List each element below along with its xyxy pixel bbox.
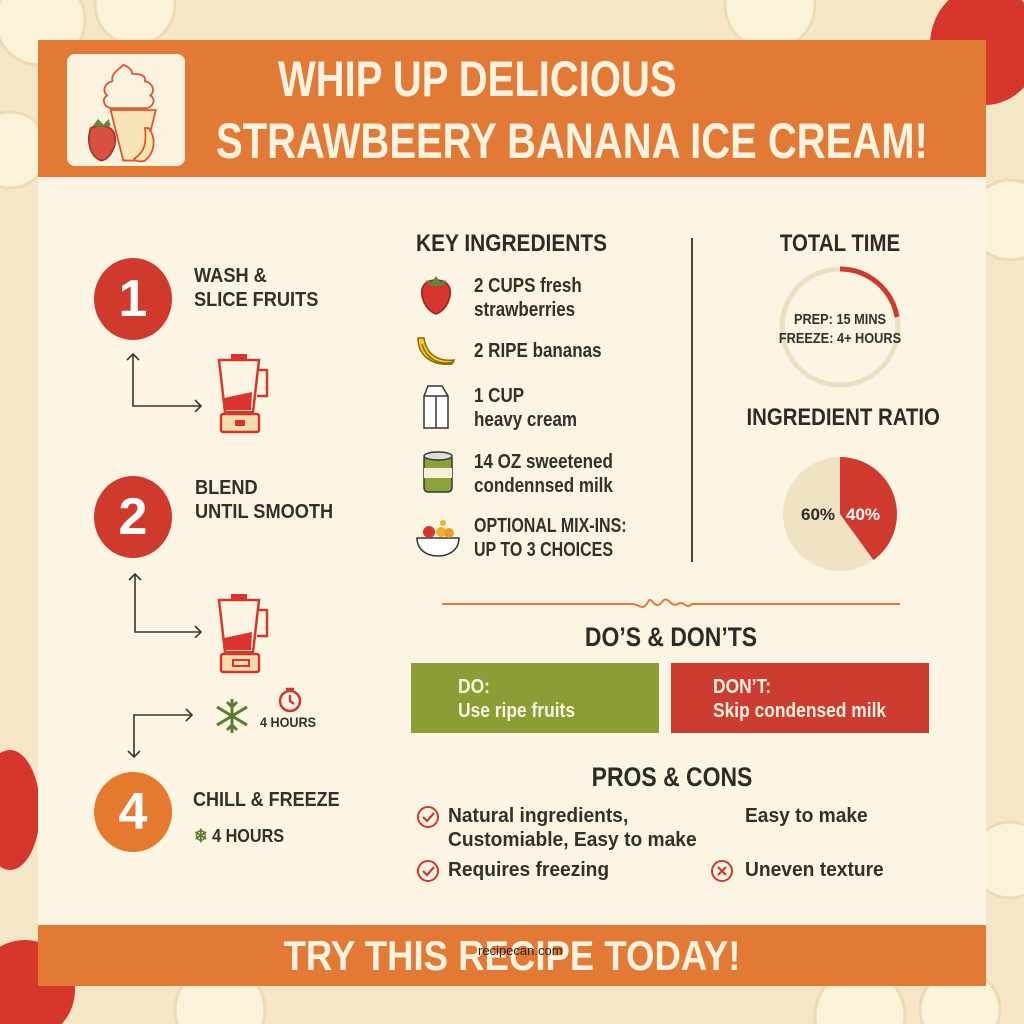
total time [779,230,901,388]
key ingredients [416,230,627,561]
pro 2: Requires freezing [448,859,609,881]
pros & cons: PROS & CONS [592,762,752,792]
step 1: SLICE FRUITS [194,289,318,311]
ingredient: bananas [417,337,602,365]
step 2: BLEND [195,477,258,499]
ingredient: strawberries: strawberries [474,299,575,321]
watermark: recipecan.com [478,943,563,958]
pros & cons [417,762,884,882]
title [216,51,928,169]
icon: blender 2 [218,594,268,674]
ingredient: condensed milk [423,451,613,497]
total time: PREP: 15 MINS [794,311,886,328]
do box [411,663,659,733]
ingredient: condensed milk: condennsed milk [474,475,613,497]
ingredient: mix-ins: OPTIONAL MIX-INS: [474,515,627,537]
ingredient ratio [746,404,940,571]
main content panel [38,177,986,925]
heading: key ingredients: KEY INGREDIENTS [416,230,607,257]
chart: pie 60/40 [783,457,897,571]
step 4 [94,772,340,852]
pro 1 [417,805,697,851]
ingredient: mix-ins: UP TO 3 CHOICES [474,539,613,561]
ingredient: condensed milk: 14 OZ sweetened [474,451,613,473]
total time: TOTAL TIME [780,230,900,257]
ingredient: heavy cream: 1 CUP [474,385,524,407]
footer banner [38,925,986,986]
con text: Easy to make [745,805,868,827]
step 2: 2 [119,488,147,546]
pro 1: Natural ingredients, [448,805,628,827]
pro 1: Customiable, Easy to make [448,829,697,851]
icon: snowflake and timer 4 hours: 4 HOURS [260,714,316,730]
chart: time ring [780,266,900,388]
chart: pie 60/40: 40% [846,505,880,524]
chart: pie 60/40: 60% [801,505,835,524]
heading: dos & don'ts: DO’S & DON’TS [585,622,757,652]
footer banner: TRY THIS RECIPE TODAY! [284,932,740,979]
ingredient: strawberries [420,275,582,321]
step 1: 1 [119,270,147,328]
con 2: Uneven texture [745,859,884,881]
title: STRAWBEERY BANANA ICE CREAM! [216,113,928,169]
ingredient: heavy cream [423,385,577,431]
arrow 3 [128,708,193,758]
arrow 1 [126,353,202,412]
step 2 [94,476,333,558]
ingredient: strawberries: 2 CUPS fresh [474,275,582,297]
icon: snowflake and timer 4 hours [216,688,316,733]
icon: blender 1 [218,354,268,434]
step 4: ❄ 4 HOURS [194,826,284,846]
title: WHIP UP DELICIOUS [278,51,677,107]
ingredient: heavy cream: heavy cream [474,409,577,431]
step 4: CHILL & FREEZE [193,789,340,811]
don't box [671,663,929,733]
total time: FREEZE: 4+ HOURS [779,330,901,347]
do box: DO: [458,676,490,698]
step 4: 4 [119,783,147,841]
ingredient ratio: INGREDIENT RATIO [746,404,940,431]
step 1 [94,258,318,340]
icon: ice cream cone with strawberry and banana [67,54,185,166]
ingredient: mix-ins [416,515,627,561]
ingredient: bananas: 2 RIPE bananas [474,340,602,362]
vertical divider [691,238,693,562]
arrow 2 [128,573,202,638]
don't box: DON’T: [713,676,771,698]
don't box: Skip condensed milk [713,700,886,722]
squiggle divider [442,598,900,608]
do box: Use ripe fruits [458,700,575,722]
step 1: WASH & [194,265,267,287]
header banner [38,40,986,177]
step 2: UNTIL SMOOTH [195,501,333,523]
